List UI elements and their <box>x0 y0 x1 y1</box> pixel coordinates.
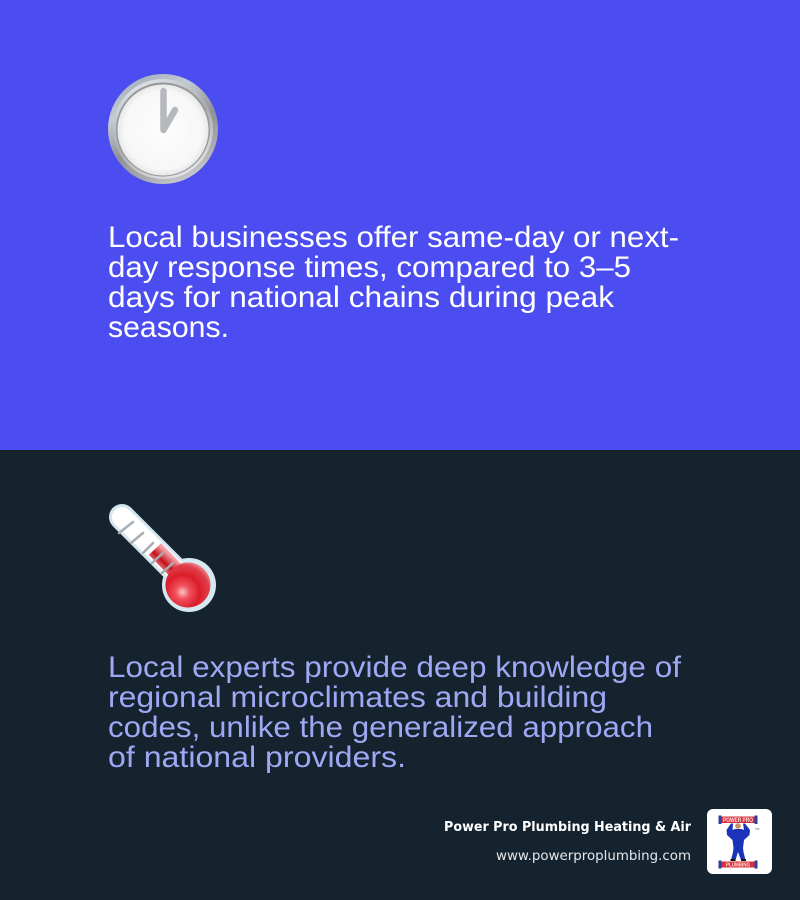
text: local expertise <box>108 651 682 774</box>
text: response times: Local businesses offer same-day or next- <box>108 221 679 254</box>
bottom pipe: PLUMBING <box>726 862 750 868</box>
text: local expertise: of national providers. <box>108 741 406 774</box>
company name: Power Pro Plumbing Heating & Air <box>444 819 691 835</box>
text: response times: days for national chains during peak <box>108 281 615 314</box>
text: local expertise: codes, unlike the generalized approach <box>108 711 653 744</box>
website: www.powerproplumbing.com <box>496 848 691 864</box>
trademark mark: TM <box>755 827 760 831</box>
icon: clock <box>108 74 218 184</box>
plumber figure <box>726 823 750 861</box>
text: local expertise: regional microclimates and building <box>108 681 607 714</box>
top pipe: POWER PRO <box>723 818 753 824</box>
icon: thermometer <box>119 517 216 612</box>
panel: response times <box>0 0 800 450</box>
text: response times <box>108 221 679 344</box>
panel: local expertise <box>0 450 800 900</box>
text: local expertise: Local experts provide deep knowledge of <box>108 651 682 684</box>
logo <box>707 809 772 874</box>
text: response times: seasons. <box>108 311 229 344</box>
text: response times: day response times, compared to 3–5 <box>108 251 631 284</box>
